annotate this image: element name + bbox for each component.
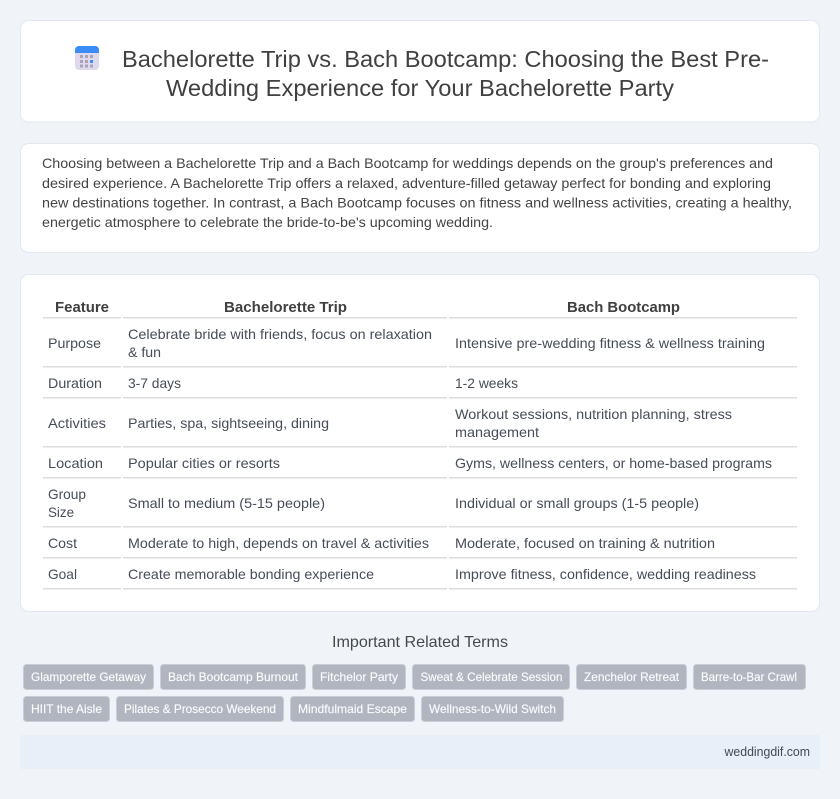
row: purpose (43, 326, 797, 368)
row: activities: Parties, spa, sightseeing, dining (128, 415, 329, 431)
title (122, 46, 769, 101)
row: goal: Goal (48, 566, 77, 582)
tag: Barre-to-Bar Crawl (694, 664, 806, 690)
tag: Glamporette Getaway (24, 664, 154, 690)
tag: Bach Bootcamp Burnout (160, 664, 306, 690)
row: goal (43, 566, 797, 590)
footer: weddingdif.com (724, 745, 810, 759)
tag: Glamporette Getaway: Glamporette Getaway (31, 670, 146, 684)
intro text panel (20, 144, 820, 252)
header panel (20, 20, 820, 122)
row: group size: Individual or small groups (1-5 people) (455, 495, 699, 511)
row: duration: 1-2 weeks (455, 375, 518, 391)
tag: Wellness-to-Wild Switch: Wellness-to-Wild Switch (429, 702, 556, 716)
row: activities (43, 406, 797, 448)
row: purpose: Celebrate bride with friends, focus on relaxation (128, 326, 432, 342)
related terms heading: Important Related Terms (332, 634, 508, 651)
row: duration: Duration (48, 375, 102, 391)
row: cost: Cost (48, 535, 77, 551)
row: location: Popular cities or resorts (128, 455, 280, 471)
tag: Mindfulmaid Escape: Mindfulmaid Escape (298, 702, 407, 716)
table header row: Feature (55, 299, 109, 316)
tag: HIIT the Aisle (24, 696, 110, 722)
row: location (43, 455, 797, 478)
footer (20, 735, 820, 769)
intro paragraph: energetic atmosphere to celebrate the bride-to-be's upcoming wedding. (42, 214, 493, 230)
tag: Fitchelor Party (312, 664, 406, 690)
row: purpose: Purpose (48, 335, 101, 351)
row: purpose: Intensive pre-wedding fitness & wellness training (455, 335, 765, 351)
row: cost: Moderate to high, depends on travel & activities (128, 535, 429, 551)
title: Bachelorette Trip vs. Bach Bootcamp: Choosing the Best Pre- (122, 46, 769, 72)
tag: Fitchelor Party: Fitchelor Party (320, 670, 398, 684)
intro paragraph: desired experience. A Bachelorette Trip offers a relaxed, adventure-filled getaway perfect for bonding and exploring (42, 175, 771, 191)
row: cost (43, 535, 797, 558)
row: activities: management (455, 424, 539, 440)
row: location: Gyms, wellness centers, or home-based programs (455, 455, 772, 471)
row: activities: Activities (48, 415, 106, 431)
tag: HIIT the Aisle: HIIT the Aisle (31, 702, 102, 716)
row: group size: Size (48, 504, 74, 520)
title: Wedding Experience for Your Bachelorette Party (166, 75, 674, 101)
row: purpose: & fun (128, 344, 161, 360)
table header row (43, 299, 797, 318)
intro paragraph: Choosing between a Bachelorette Trip and a Bach Bootcamp for weddings depends on the group's preferences and (42, 155, 773, 171)
tag: Sweat & Celebrate Session: Sweat & Celebrate Session (420, 670, 562, 684)
row: group size: Small to medium (5-15 people) (128, 495, 325, 511)
row: location: Location (48, 455, 103, 471)
tag: Barre-to-Bar Crawl: Barre-to-Bar Crawl (701, 670, 797, 684)
row: group size: Group (48, 486, 86, 502)
tag: Pilates & Prosecco Weekend: Pilates & Prosecco Weekend (124, 702, 276, 716)
tag: Sweat & Celebrate Session (412, 664, 570, 690)
row: group size (43, 486, 797, 528)
row: duration (43, 375, 797, 398)
comparison table panel (20, 274, 820, 612)
table header row: Bachelorette Trip (224, 299, 347, 316)
related terms tags (24, 664, 806, 722)
tag: Wellness-to-Wild Switch (422, 696, 564, 722)
intro paragraph: new destinations together. In contrast, a Bach Bootcamp focuses on fitness and wellness activities, creating a healthy, (42, 194, 792, 210)
tag: Mindfulmaid Escape (290, 696, 414, 722)
icon: calendar (75, 46, 99, 70)
row: duration: 3-7 days (128, 375, 181, 391)
tag: Zenchelor Retreat: Zenchelor Retreat (584, 670, 680, 684)
row: activities: Workout sessions, nutrition planning, stress (455, 406, 732, 422)
intro paragraph (42, 155, 792, 230)
row: goal: Improve fitness, confidence, wedding readiness (455, 566, 756, 582)
tag: Zenchelor Retreat (576, 664, 686, 690)
row: cost: Moderate, focused on training & nutrition (455, 535, 715, 551)
row: goal: Create memorable bonding experience (128, 566, 374, 582)
tag: Bach Bootcamp Burnout: Bach Bootcamp Burnout (168, 670, 299, 684)
tag: Pilates & Prosecco Weekend (116, 696, 284, 722)
table header row: Bach Bootcamp (567, 299, 680, 316)
